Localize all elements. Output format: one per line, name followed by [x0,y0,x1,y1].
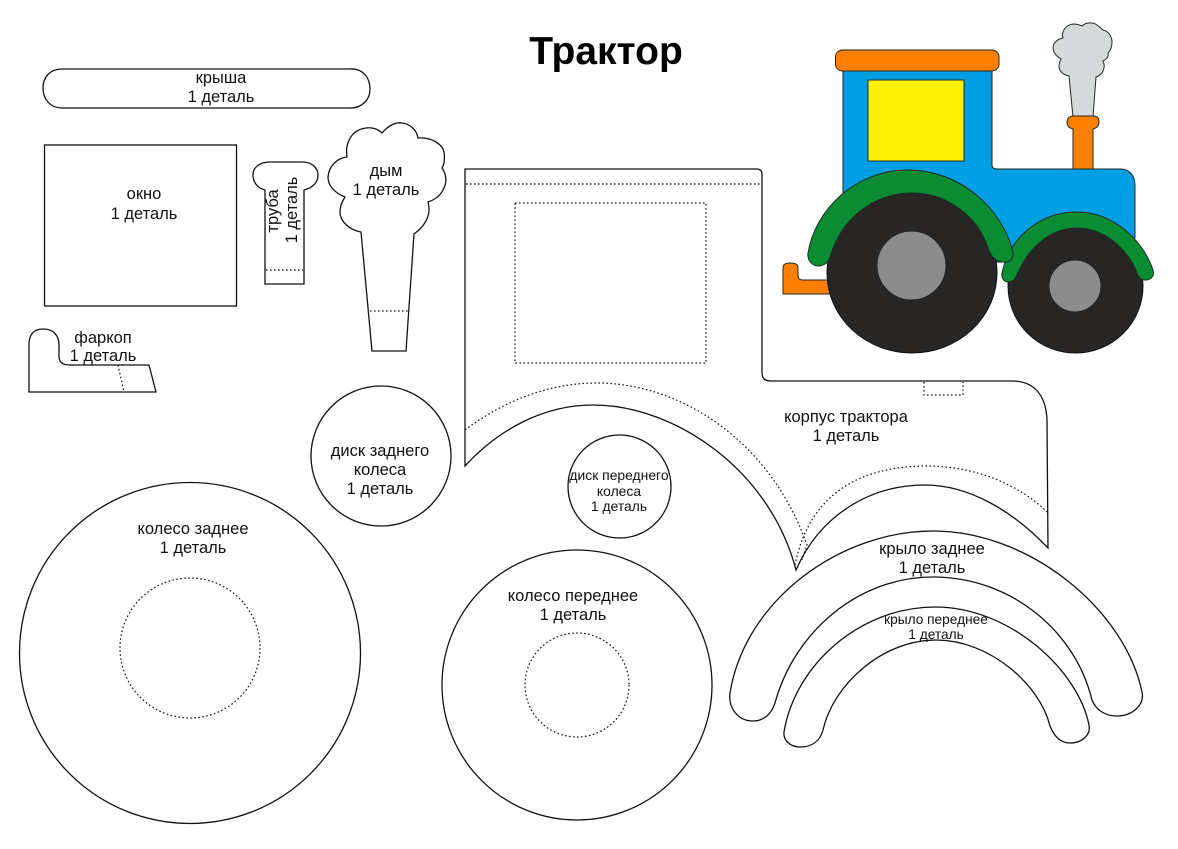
pattern: window: окно [127,185,161,203]
icon: tractor body [843,70,1135,262]
icon: tow hitch [783,263,835,294]
pattern: tow hitch [29,329,156,392]
icon: exhaust pipe [1067,116,1099,171]
pattern: front wheel disc: 1 деталь [591,498,647,514]
pattern: rear wheel disc [311,386,451,526]
pattern: pipe [253,162,318,284]
pattern: pipe: труба [264,189,282,233]
icon: front wheel [1008,219,1143,353]
pattern: front fender: 1 деталь [908,627,964,642]
icon: cab window [868,80,964,161]
pattern: rear wheel [20,482,360,824]
pattern: rear wheel disc: диск заднего [331,442,429,460]
pattern: tractor body [465,169,1048,570]
icon: front fender [1002,212,1153,282]
pattern: front fender [784,607,1089,747]
pattern: roof: 1 деталь [188,88,254,106]
pattern: smoke [328,123,446,351]
pattern: pipe: 1 деталь [283,177,301,243]
pattern: rear fender: крыло заднее [879,540,985,558]
pattern: rear wheel: 1 деталь [160,539,226,557]
icon: rear fender [808,170,1013,266]
illustration: assembled tractor [783,23,1153,353]
pattern: front wheel: 1 деталь [540,606,606,624]
icon: roof [836,50,999,71]
pattern: smoke: дым [370,162,402,180]
icon: front wheel disc [1049,260,1101,312]
pattern: tow hitch: фаркоп [74,329,132,347]
pattern: front wheel: колесо переднее [508,587,638,605]
icon: rear wheel [827,193,997,353]
pattern: rear fender [730,531,1142,721]
pattern: roof: крыша [196,69,247,87]
pattern: rear fender: 1 деталь [899,559,965,577]
pattern: tow hitch: 1 деталь [70,347,136,365]
pattern: tractor body: 1 деталь [813,427,879,445]
pattern: front wheel disc: диск переднего [569,467,669,483]
pattern: smoke: 1 деталь [353,181,419,199]
icon: rear wheel disc [877,231,946,300]
pattern: tractor body: корпус трактора [784,408,909,426]
pattern: window: 1 деталь [111,205,177,223]
pattern: rear wheel disc: колеса [354,461,407,479]
pattern: front wheel disc: колеса [597,483,641,499]
pattern: front fender: крыло переднее [884,612,988,627]
icon: smoke [1053,23,1112,117]
pattern: front wheel disc [568,435,671,538]
pattern: rear wheel disc: 1 деталь [347,480,413,498]
pattern: roof [43,69,370,108]
pattern: rear wheel: колесо заднее [137,520,249,538]
pattern: front wheel [442,550,712,820]
title: Трактор [529,30,683,73]
pattern: window [44,145,236,306]
